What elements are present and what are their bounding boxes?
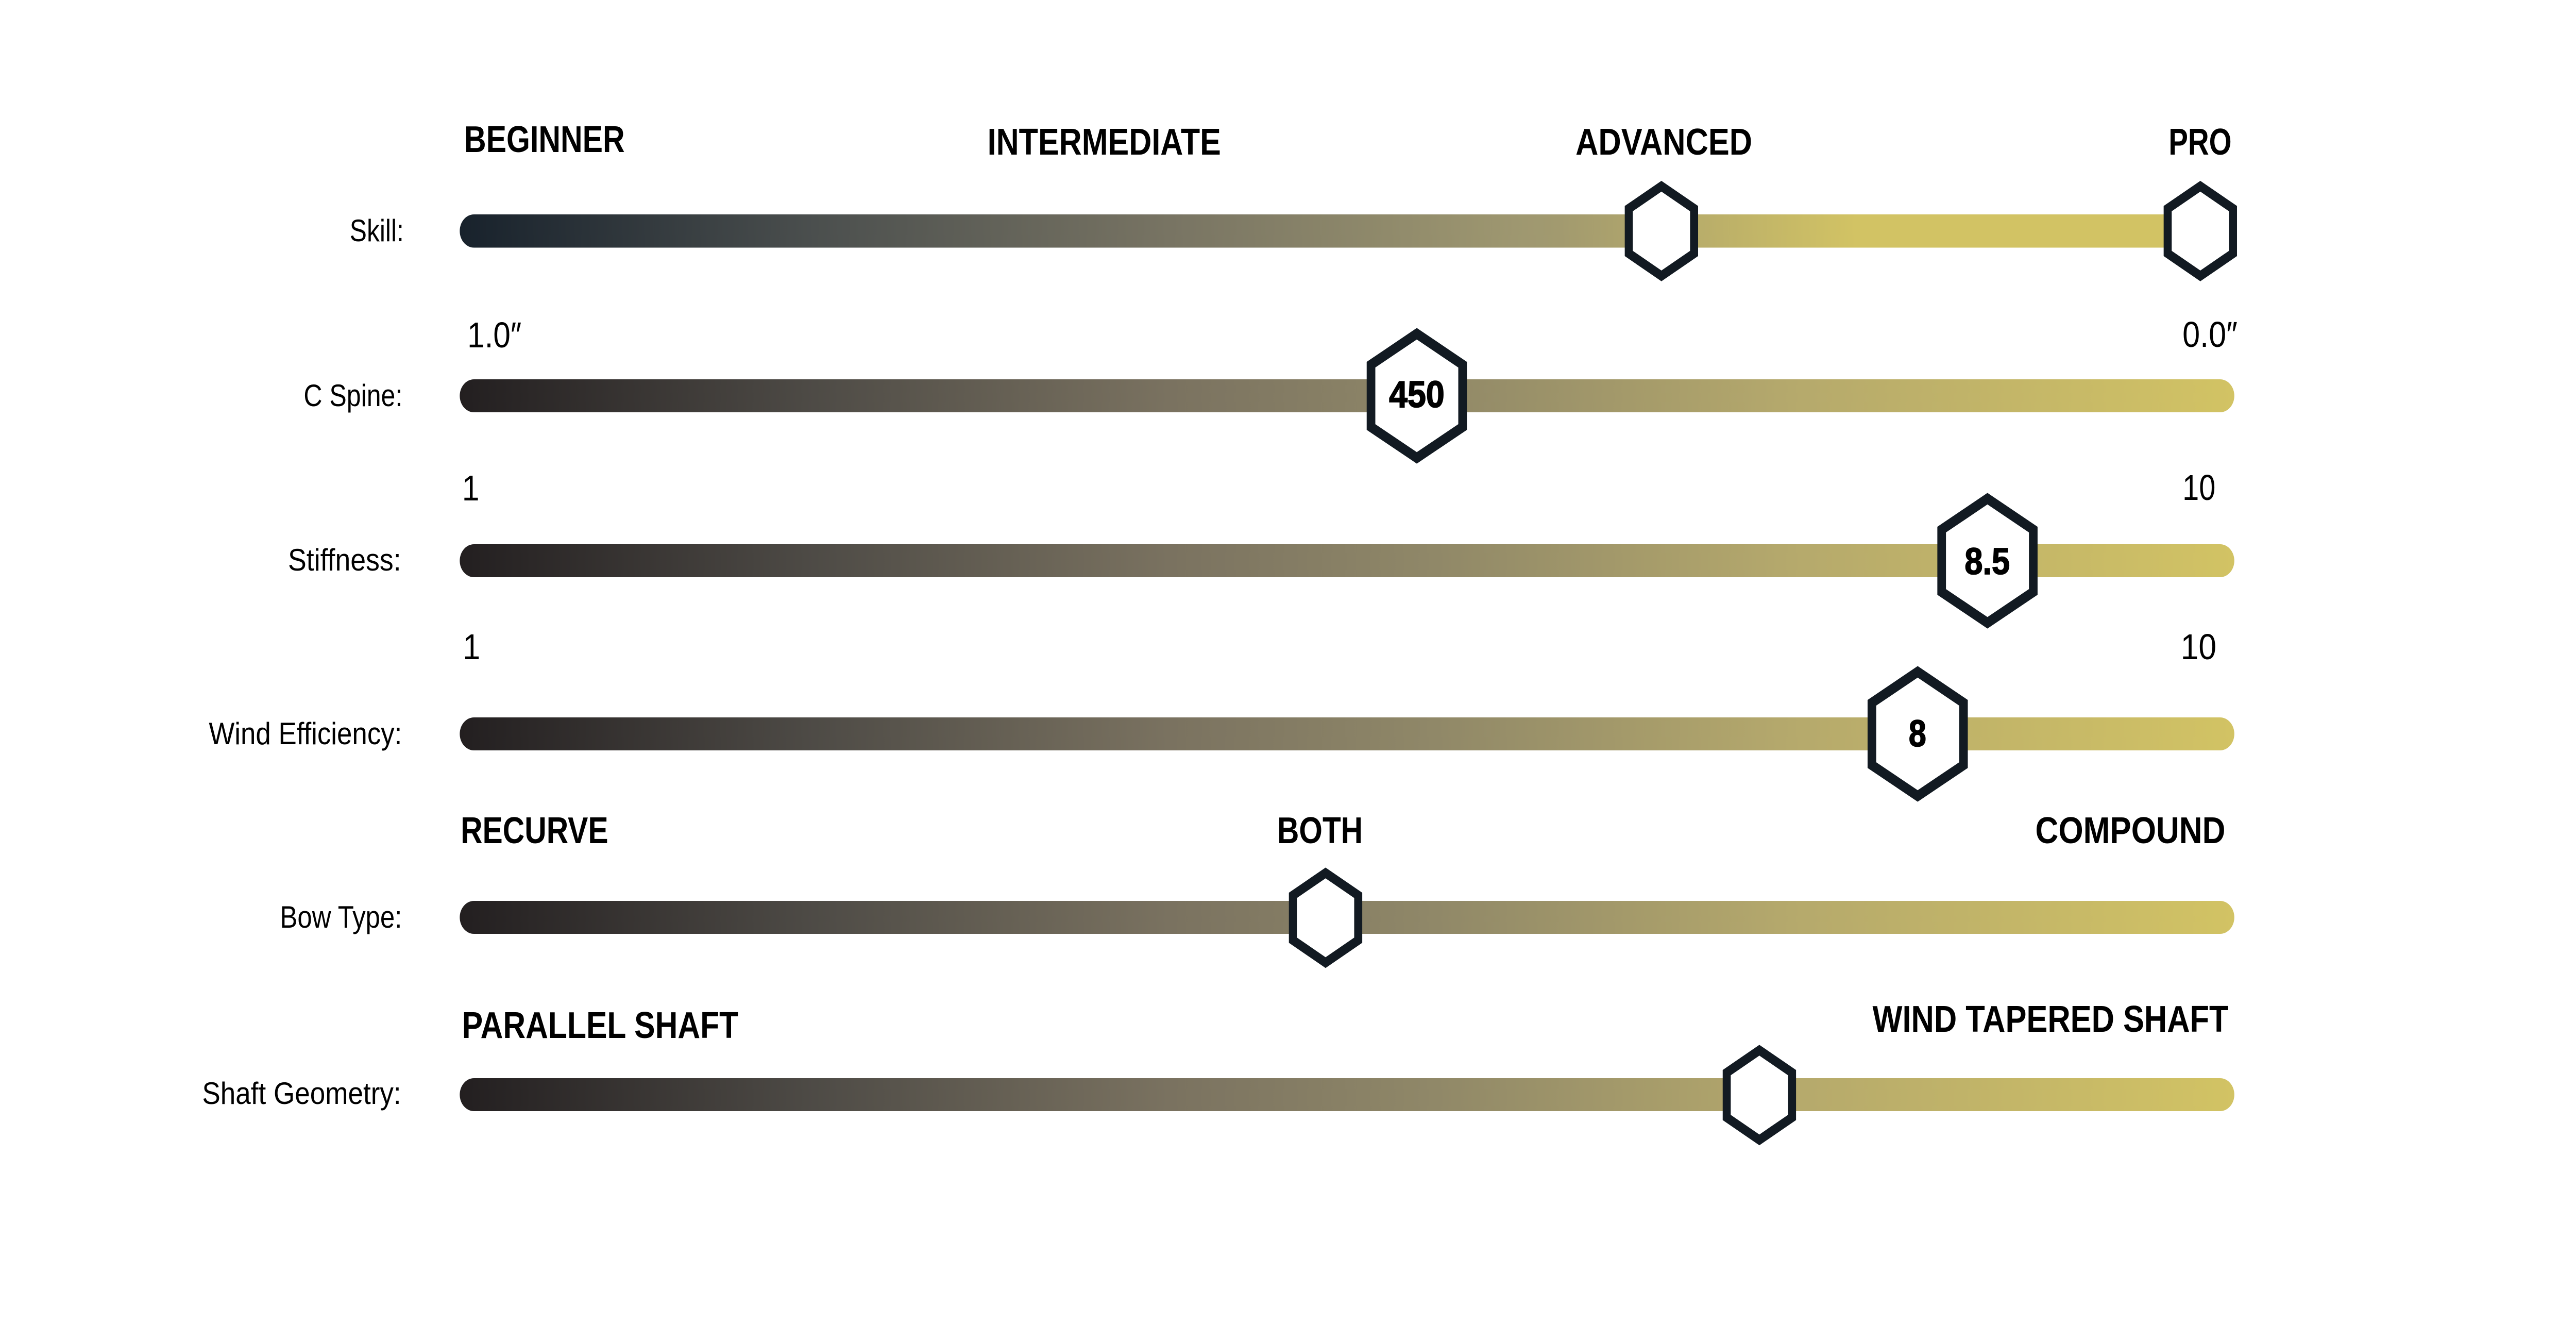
row: wind efficiency <box>209 627 2234 796</box>
row: shaft geometry <box>202 999 2234 1140</box>
scale label: both: BOTH <box>1277 810 1363 851</box>
hexagon marker: advanced <box>1629 186 1694 276</box>
hexagon marker: pro <box>2167 186 2233 276</box>
scale label: parallel shaft: PARALLEL SHAFT <box>462 1005 738 1046</box>
gradient bar: shaft geometry <box>460 1078 2234 1111</box>
row: stiffness <box>288 467 2234 623</box>
scale value: 10: 10 <box>2182 467 2215 508</box>
label: Stiffness: Stiffness: <box>288 543 401 577</box>
label: Wind Efficiency: Wind Efficiency: <box>209 716 402 751</box>
scale value: 1: 1 <box>462 468 479 508</box>
scale label: pro: PRO <box>2168 122 2232 163</box>
marker value: 450: 450 <box>1389 374 1445 415</box>
scale label: compound: COMPOUND <box>2036 810 2225 851</box>
gradient bar: c spine <box>460 379 2234 412</box>
scale label: wind tapered shaft: WIND TAPERED SHAFT <box>1873 999 2229 1040</box>
label: Skill: Skill: <box>350 213 404 248</box>
hexagon marker: 450 <box>1371 334 1463 458</box>
gradient bar: stiffness <box>460 544 2234 577</box>
scale label: intermediate: INTERMEDIATE <box>988 122 1221 163</box>
label: Bow Type: Bow Type: <box>280 900 402 934</box>
gradient bar: skill <box>460 214 2234 247</box>
scale value: 0.0 inch: 0.0″ <box>2182 314 2238 355</box>
scale value: 10: 10 <box>2181 627 2216 667</box>
label: Shaft Geometry: Shaft Geometry: <box>202 1076 401 1111</box>
scale label: advanced: ADVANCED <box>1575 122 1752 163</box>
gradient bar: wind efficiency <box>460 717 2234 750</box>
scale label: recurve: RECURVE <box>461 810 608 851</box>
scale label: beginner: BEGINNER <box>464 119 625 160</box>
hexagon marker: shaft geometry <box>1727 1050 1792 1140</box>
gradient bar: bow type <box>460 901 2234 934</box>
hexagon marker: 8 <box>1872 672 1963 796</box>
marker value: 8: 8 <box>1909 713 1926 755</box>
row: c spine <box>303 314 2238 458</box>
scale value: 1: 1 <box>463 627 480 667</box>
hexagon marker: both <box>1293 873 1358 963</box>
label: C Spine: C Spine: <box>303 378 402 413</box>
marker value: 8.5: 8.5 <box>1964 541 2010 582</box>
row: skill <box>350 119 2234 276</box>
scale value: 1.0 inch: 1.0″ <box>467 315 521 355</box>
hexagon marker: 8.5 <box>1942 499 2033 623</box>
row: bow type <box>280 810 2234 963</box>
